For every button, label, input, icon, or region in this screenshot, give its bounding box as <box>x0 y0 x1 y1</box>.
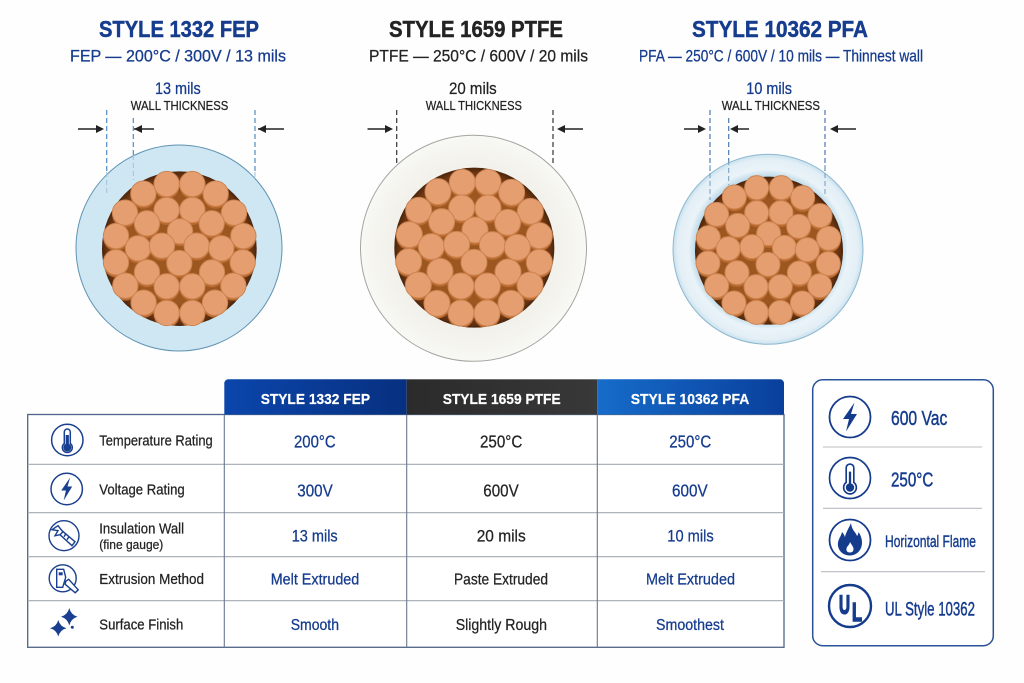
wall thickness callout: FEP <box>78 80 284 172</box>
row: voltage rating: 600V <box>483 481 519 501</box>
row: surface finish: Smoothest <box>656 617 724 634</box>
row: extrusion method: Melt Extruded <box>271 571 359 588</box>
header: style 1659 PTFE: STYLE 1659 PTFE <box>443 391 561 408</box>
row: insulation wall: 10 mils <box>667 527 714 546</box>
icon: calipers <box>49 521 79 551</box>
heading: style 1332 FEP: FEP — 200°C / 300V / 13 mils <box>70 46 286 66</box>
table body frame <box>28 414 784 647</box>
row: temperature rating: 250°C <box>669 432 711 452</box>
header: style 1659 PTFE <box>407 379 597 414</box>
row: temperature rating <box>52 424 711 456</box>
item: 250°C: 250°C <box>891 470 933 492</box>
row: insulation wall: Insulation Wall <box>99 520 184 537</box>
icon: lightning bolt <box>830 396 870 438</box>
wall thickness callout: PTFE <box>368 80 583 163</box>
row: insulation wall: 20 mils <box>477 527 526 546</box>
icon: lightning bolt <box>51 473 82 505</box>
heading: style 10362 PFA: PFA — 250°C / 600V / 10 mils — Thinnest wall <box>639 46 923 66</box>
heading: style 1659 PTFE: PTFE — 250°C / 600V / 20 mils <box>369 46 588 66</box>
row: extrusion method: Extrusion Method <box>99 571 204 588</box>
row: surface finish: Slightly Rough <box>456 617 547 634</box>
row: voltage rating: Voltage Rating <box>99 481 185 498</box>
heading: style 10362 PFA: STYLE 10362 PFA <box>692 16 868 42</box>
row: extrusion method <box>49 565 735 593</box>
item: UL Style 10362 <box>829 585 975 627</box>
row: insulation wall <box>49 520 714 552</box>
heading: style 10362 PFA <box>639 16 923 66</box>
row: voltage rating: 600V <box>672 481 708 501</box>
icon: flame <box>830 520 870 560</box>
wall thickness callout: PTFE: 20 mils <box>449 80 497 98</box>
item: UL Style 10362: UL Style 10362 <box>885 600 975 621</box>
row: voltage rating: 300V <box>297 481 333 501</box>
header: style 1332 FEP <box>224 379 407 414</box>
wall thickness callout: PTFE: WALL THICKNESS <box>426 98 522 113</box>
wall thickness callout: FEP: WALL THICKNESS <box>131 98 229 113</box>
item: 250°C <box>830 458 933 498</box>
icon: UL mark <box>829 585 871 627</box>
row: temperature rating: 200°C <box>294 432 336 452</box>
wall thickness callout: PFA <box>684 80 856 200</box>
icon: sparkles <box>50 608 78 636</box>
header: style 1332 FEP: STYLE 1332 FEP <box>261 391 370 408</box>
cable cross-section: PFA <box>673 154 863 344</box>
header: style 10362 PFA <box>597 379 784 414</box>
wall thickness callout: PFA: 10 mils <box>746 80 792 98</box>
icon: thermometer <box>52 424 83 456</box>
row: voltage rating <box>51 473 708 505</box>
heading: style 1332 FEP <box>70 16 286 66</box>
wall thickness callout: FEP: 13 mils <box>155 80 201 98</box>
icon: UL mark: L <box>852 597 862 627</box>
item: 600 Vac <box>830 396 947 438</box>
icon: extrusion tool <box>49 565 78 593</box>
row: surface finish: Surface Finish <box>99 616 183 633</box>
row: insulation wall: 13 mils <box>292 527 338 546</box>
row: temperature rating: Temperature Rating <box>99 433 213 450</box>
heading: style 1659 PTFE: STYLE 1659 PTFE <box>389 16 563 42</box>
header: style 10362 PFA: STYLE 10362 PFA <box>631 391 749 408</box>
row: extrusion method: Melt Extruded <box>646 571 735 588</box>
item: horizontal flame: Horizontal Flame <box>885 532 976 551</box>
icon: thermometer <box>830 458 870 498</box>
row: surface finish <box>50 608 724 636</box>
cable cross-section: FEP <box>76 145 282 351</box>
row: insulation wall: (fine gauge) <box>99 537 163 552</box>
heading: style 1659 PTFE <box>369 16 588 66</box>
heading: style 1332 FEP: STYLE 1332 FEP <box>99 16 259 42</box>
wall thickness callout: PFA: WALL THICKNESS <box>722 98 820 113</box>
item: horizontal flame <box>830 520 976 560</box>
cable cross-section: PTFE <box>360 135 586 361</box>
row: surface finish: Smooth <box>291 617 339 634</box>
comparison table <box>28 379 784 647</box>
row: extrusion method: Paste Extruded <box>454 571 548 588</box>
panel: UL certification summary <box>813 380 993 646</box>
row: temperature rating: 250°C <box>480 432 522 452</box>
item: 600 Vac: 600 Vac <box>891 408 947 430</box>
icon: UL mark: U <box>839 589 850 619</box>
